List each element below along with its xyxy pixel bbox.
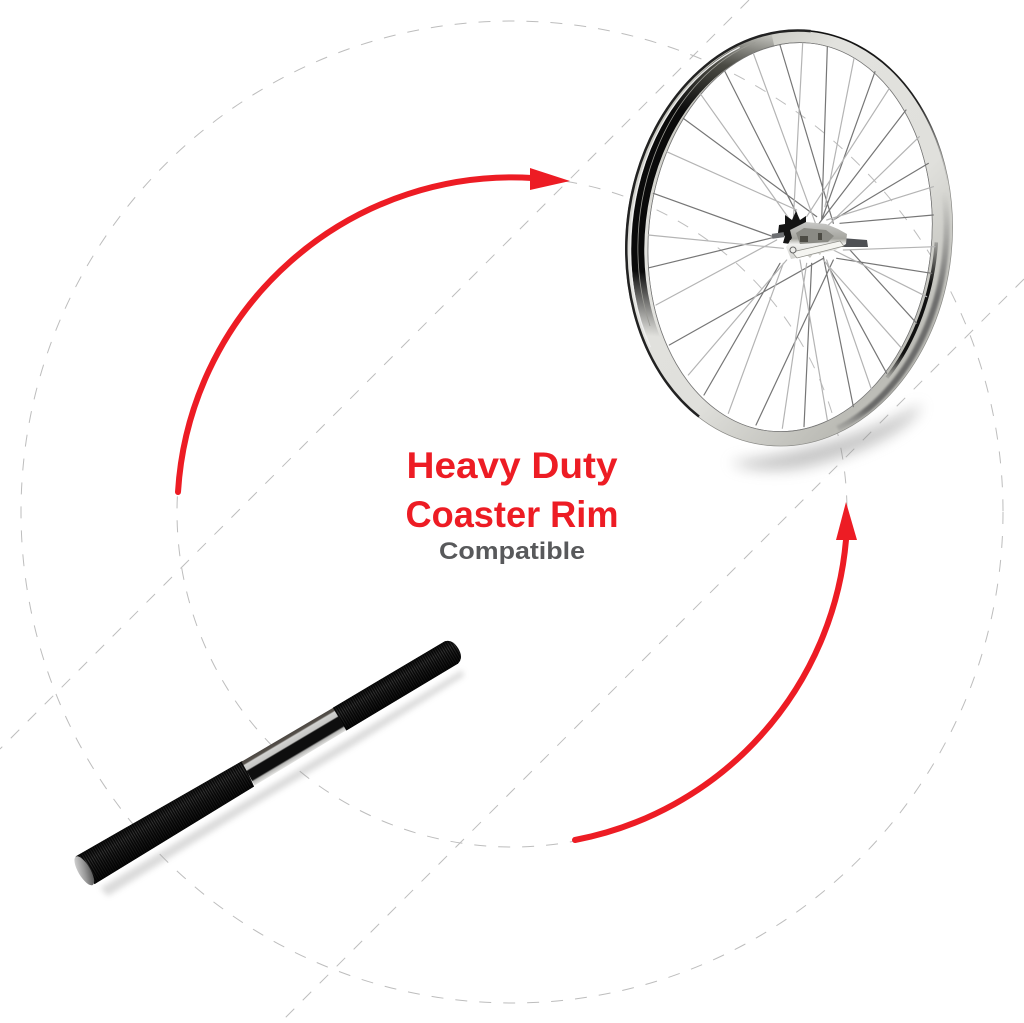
axle stub (841, 238, 868, 247)
spokes (648, 43, 935, 428)
end cap (71, 854, 98, 888)
smooth center (241, 707, 348, 786)
wheel rim (605, 14, 973, 462)
hub dark detail (796, 228, 834, 244)
axle body (71, 634, 467, 888)
red arrow: wheel to axle (575, 502, 857, 840)
heading line one: Heavy Duty (406, 444, 618, 486)
hub body (786, 222, 847, 259)
sprocket (778, 211, 806, 250)
right thread (333, 637, 465, 730)
axle shadow (100, 670, 464, 896)
hub highlights (792, 241, 844, 258)
center label (406, 444, 618, 565)
threaded axle rod (71, 634, 467, 896)
sub heading: Compatible (439, 538, 585, 565)
left thread (76, 758, 258, 885)
bicycle wheel (605, 14, 973, 462)
wheel floor shadow (730, 404, 922, 470)
hub and sprocket (772, 211, 868, 259)
heading line two: Coaster Rim (406, 493, 618, 535)
red arrow: axle to wheel (178, 168, 570, 492)
sprocket teeth bottom (787, 240, 824, 258)
